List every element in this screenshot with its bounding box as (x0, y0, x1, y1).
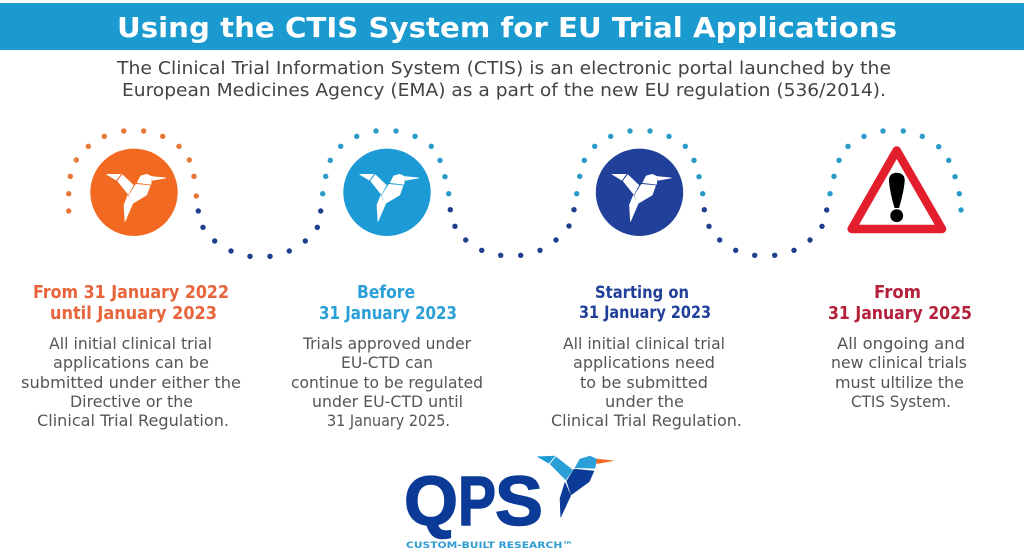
logo wordmark: Q (404, 462, 458, 540)
title: Using the CTIS System for EU Trial Applications (117, 12, 897, 44)
body text: applications need (573, 354, 715, 372)
panel: starting on 31 January 2023 (551, 283, 742, 430)
heading: Before 31 January 2023: Before (357, 283, 415, 303)
heading: From 31 January 2022 until January 2023: From 31 January 2022 (33, 283, 229, 303)
body text: under EU-CTD until (312, 393, 463, 411)
heading: From 31 January 2022 until January 2023: until January 2023 (50, 304, 217, 324)
body text (551, 335, 742, 430)
heading: From 31 January 2025: 31 January 2025 (828, 304, 972, 324)
body text: Clinical Trial Regulation. (551, 412, 742, 430)
body text: All initial clinical trial (563, 335, 725, 353)
heading: Starting on 31 January 2023: Starting on (595, 283, 689, 302)
body text: submitted under either the (21, 374, 241, 392)
body text: Directive or the (70, 393, 193, 411)
logo wordmark (404, 462, 543, 540)
body text: All ongoing and (837, 335, 965, 353)
body text: Trials approved under (302, 335, 472, 353)
icon: orange circle with bird (90, 149, 178, 236)
icon: navy circle with bird (596, 149, 683, 236)
heading: From 31 January 2025: From (874, 283, 921, 303)
body text: applications can be (53, 354, 209, 372)
heading: Starting on 31 January 2023: 31 January 2023 (579, 303, 711, 322)
heading: Starting on 31 January 2023 (579, 283, 711, 322)
body text: new clinical trials (831, 354, 967, 372)
heading: Before 31 January 2023 (319, 283, 457, 324)
body text: under the (605, 393, 684, 411)
panel: from 31 January 2025 (828, 283, 972, 411)
dotted trough: navy segments (196, 207, 829, 259)
logo wordmark: P (458, 462, 496, 540)
body text: 31 January 2025. (327, 412, 450, 430)
logo: QPS (404, 456, 613, 549)
body text (831, 335, 967, 411)
intro text: The Clinical Trial Information System (CTIS) is an electronic portal launched by the (116, 58, 891, 79)
logo wordmark: S (495, 462, 543, 540)
heading: From 31 January 2022 until January 2023 (33, 283, 229, 324)
panel: first period (21, 283, 241, 430)
body text: continue to be regulated (291, 374, 483, 392)
icon: warning triangle (852, 150, 942, 229)
intro text (116, 58, 891, 101)
heading: From 31 January 2025 (828, 283, 972, 324)
dotted arcs: blue around circles two, three and the warning sign (320, 128, 964, 213)
body text: Clinical Trial Regulation. (37, 412, 229, 430)
body text: CTIS System. (851, 393, 951, 411)
icon: blue circle with bird (343, 149, 431, 236)
dotted arc: orange around first circle (66, 128, 199, 214)
intro text: European Medicines Agency (EMA) as a part of the new EU regulation (536/2014). (122, 80, 886, 101)
heading: Before 31 January 2023: 31 January 2023 (319, 304, 457, 324)
panel: before 31 January 2023 (291, 283, 483, 430)
body text: All initial clinical trial (49, 335, 212, 353)
body text: to be submitted (580, 374, 708, 392)
logo bird (537, 456, 613, 517)
body text (291, 335, 483, 430)
body text: must ultilize the (835, 374, 964, 392)
body text: EU-CTD can (341, 354, 433, 372)
title banner (0, 3, 1024, 50)
body text (21, 335, 241, 430)
